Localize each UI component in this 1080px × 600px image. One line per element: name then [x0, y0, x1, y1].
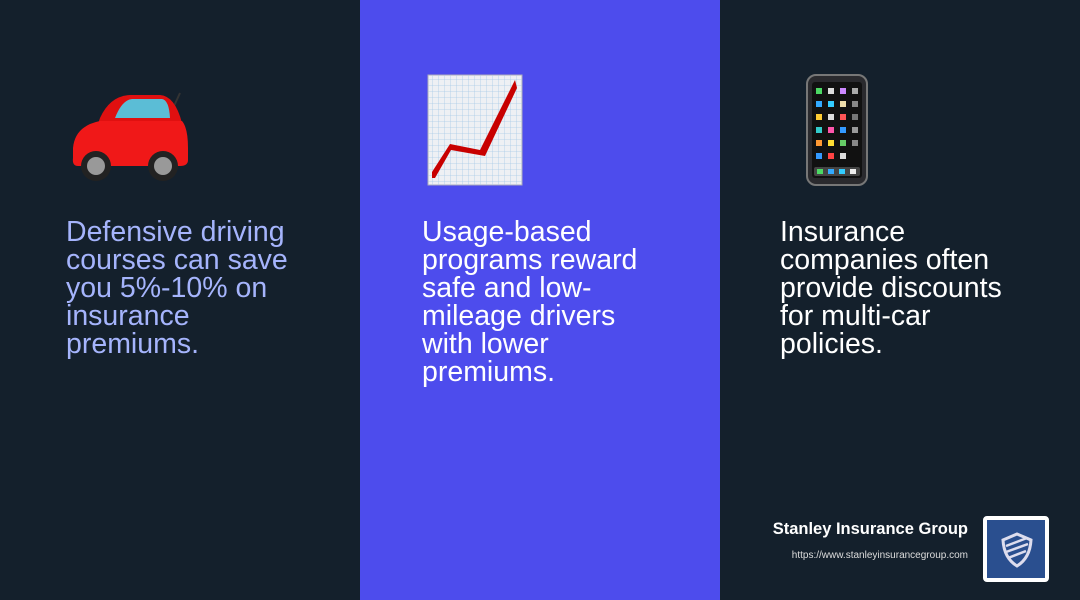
- brand url: https://www.stanleyinsurancegroup.com: [792, 550, 968, 561]
- icon: chart: [428, 74, 522, 186]
- panel: usage-based: [360, 0, 720, 600]
- icon: phone: [806, 74, 868, 186]
- text: multi-car: Insurance companies often provide discounts for multi-car policies.: [780, 216, 1002, 360]
- logo: [983, 516, 1049, 582]
- text: defensive driving: Defensive driving courses can save you 5%-10% on insurance premiums.: [66, 216, 288, 360]
- text: usage-based: Usage-based programs reward safe and low-mileage drivers with lower premiums.: [422, 216, 637, 388]
- brand footer: [773, 516, 1049, 582]
- panel: defensive driving: [0, 0, 360, 600]
- panel: multi-car: [720, 0, 1080, 600]
- brand name: Stanley Insurance Group: [773, 520, 968, 538]
- icon: car: [72, 92, 188, 181]
